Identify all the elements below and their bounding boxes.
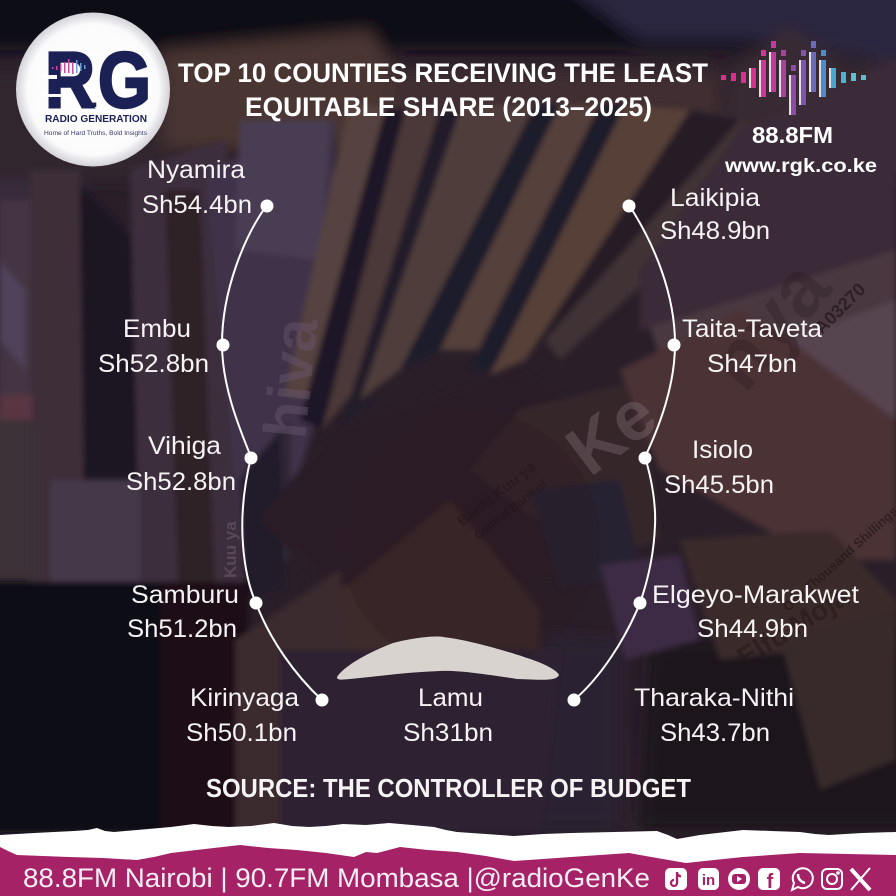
title: EQUITABLE SHARE (2013–2025) xyxy=(245,92,652,122)
label: Lamu: Lamu xyxy=(418,684,483,712)
label: Lamu: Sh31bn xyxy=(403,719,493,747)
icon: tiktok xyxy=(665,868,687,890)
label: Isiolo: Isiolo xyxy=(692,436,753,464)
boomerang: Lamu marker xyxy=(337,637,559,680)
label: Elgeyo-Marakwet: Sh44.9bn xyxy=(697,615,808,643)
icon: linkedin: in xyxy=(702,872,715,889)
background: banknotes photo: Central Bank of xyxy=(471,476,551,542)
label: Elgeyo-Marakwet: Elgeyo-Marakwet xyxy=(652,581,859,609)
diagonal strips xyxy=(285,100,385,400)
logo: Radio Generation badge: G xyxy=(98,35,151,124)
label: Tharaka-Nithi xyxy=(568,684,794,747)
footer: magenta bar xyxy=(0,845,896,896)
label: Lamu xyxy=(403,684,493,747)
title: TOP 10 COUNTIES RECEIVING THE LEAST xyxy=(178,58,708,88)
background: banknotes photo: Ke xyxy=(552,374,670,490)
label: Laikipia: Laikipia xyxy=(670,184,760,212)
logo: Radio Generation badge xyxy=(16,12,170,166)
icon: facebook xyxy=(758,868,780,893)
label: Taita-Taveta xyxy=(668,315,822,378)
right arc connector xyxy=(574,205,675,700)
label: Vihiga: Sh52.8bn xyxy=(126,468,236,496)
icon: facebook: f xyxy=(767,871,774,893)
logo: Radio Generation badge: Home of Hard Truths, Bold Insights xyxy=(44,130,148,137)
icon: radio sound wave xyxy=(721,41,866,115)
background: banknotes photo: Elfu Moja xyxy=(732,581,854,673)
footer: torn paper band xyxy=(0,823,896,870)
label: Laikipia: Sh48.9bn xyxy=(660,217,770,245)
label: Samburu: Samburu xyxy=(131,581,239,609)
icon: youtube xyxy=(728,868,750,890)
label: Kirinyaga: Kirinyaga xyxy=(190,684,299,712)
label: Samburu: Sh51.2bn xyxy=(127,615,237,643)
station website: www.rgk.co.ke xyxy=(724,155,877,177)
station frequency: 88.8FM xyxy=(752,122,833,148)
label: Taita-Taveta: Taita-Taveta xyxy=(682,315,822,343)
label: Embu: Embu xyxy=(123,315,191,343)
logo: Radio Generation badge: R xyxy=(45,35,95,124)
label: Kirinyaga: Sh50.1bn xyxy=(186,719,297,747)
background: banknotes photo: Banki Kuu ya xyxy=(454,458,540,530)
icon: X xyxy=(851,868,870,890)
label: Nyamira: Nyamira xyxy=(147,156,245,184)
lower centre and right notes xyxy=(260,370,640,590)
label: Laikipia xyxy=(622,184,770,245)
logo: Radio Generation badge: RADIO GENERATION xyxy=(45,114,147,125)
label: Tharaka-Nithi: Sh43.7bn xyxy=(660,719,770,747)
note fan left xyxy=(0,200,40,420)
label: Samburu xyxy=(127,581,262,643)
logo: Radio Generation badge: . xyxy=(90,81,98,114)
label: Tharaka-Nithi: Tharaka-Nithi xyxy=(634,684,794,712)
background: banknotes photo: Kuu ya xyxy=(221,521,240,578)
background: banknotes photo: A03270 xyxy=(811,279,869,338)
title xyxy=(178,58,708,122)
icon: whatsapp xyxy=(792,868,813,890)
label: Nyamira xyxy=(142,156,274,219)
source note: SOURCE: THE CONTROLLER OF BUDGET xyxy=(206,773,691,803)
background: banknotes photo: hiva xyxy=(251,314,331,441)
label: Taita-Taveta: Sh47bn xyxy=(707,350,797,378)
dark lower left block xyxy=(0,582,165,832)
label: Embu: Sh52.8bn xyxy=(98,350,209,378)
label: Kirinyaga xyxy=(186,684,328,747)
icon: linkedin xyxy=(698,868,719,890)
label: Vihiga: Vihiga xyxy=(148,432,221,460)
label: Vihiga xyxy=(126,432,258,496)
label: Elgeyo-Marakwet xyxy=(634,581,859,643)
background: banknotes photo: nya xyxy=(690,243,847,406)
label: Isiolo: Sh45.5bn xyxy=(664,471,774,499)
icon: instagram xyxy=(822,869,842,889)
left arc connector xyxy=(222,205,322,700)
footer: frequencies and handle: 88.8FM Nairobi | 90.7FM Mombasa |@radioGenKe xyxy=(23,863,650,893)
label: Embu xyxy=(98,315,230,378)
label: Nyamira: Sh54.4bn xyxy=(142,191,252,219)
label: Isiolo xyxy=(638,436,774,499)
